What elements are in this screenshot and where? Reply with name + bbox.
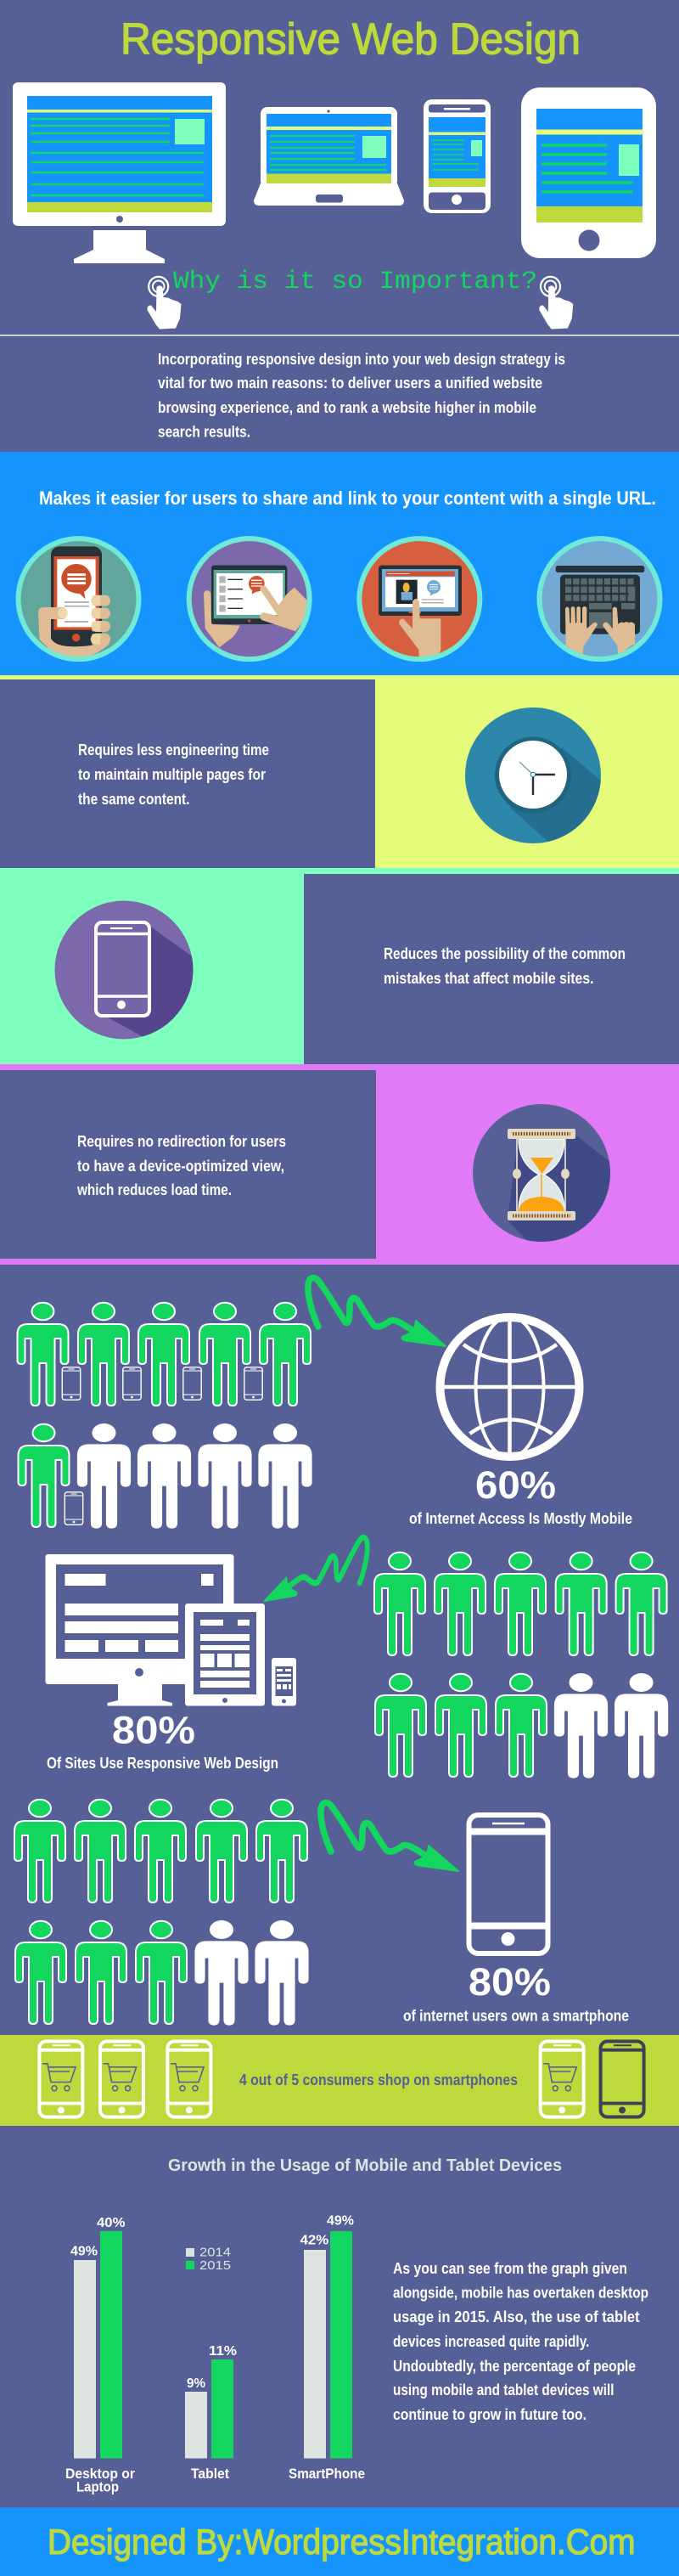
icon: right pointing hand	[539, 277, 573, 330]
icon: phone with cart 3	[167, 2042, 210, 2117]
bars: smartphone: 49%	[327, 2213, 354, 2228]
bars: desktop or laptop: 49%	[70, 2244, 98, 2258]
text: chart commentary: usage in 2015. Also, the use of tablet	[393, 2308, 640, 2325]
text: no redirection: which reduces load time.	[76, 1181, 232, 1198]
stat: 80 percent responsive: 80%	[112, 1709, 195, 1751]
people row 1	[374, 1553, 667, 1655]
stat: 60 percent	[409, 1463, 632, 1527]
stat group: responsive sites people	[374, 1553, 667, 1777]
icon: tablet	[521, 87, 656, 258]
icon: large smartphone	[469, 1815, 548, 1953]
bars: tablet: Tablet	[191, 2466, 229, 2482]
text: fewer mistakes: mistakes that affect mobile sites.	[384, 969, 594, 987]
arrow: people to globe	[308, 1278, 446, 1346]
bars: tablet	[185, 2344, 237, 2482]
stat: 80 percent smartphone: 80%	[469, 1960, 551, 2004]
people row 2	[19, 1423, 311, 1527]
icon: finger tapping tablet	[359, 538, 480, 661]
footer band	[0, 2507, 679, 2576]
chart legend: 2015	[199, 2258, 231, 2273]
text: chart commentary: using mobile and tablet devices will	[393, 2381, 614, 2398]
bars: smartphone: SmartPhone	[289, 2466, 365, 2482]
icon: phone with cart 1	[39, 2042, 82, 2117]
tablet	[185, 1604, 265, 1705]
panel: share single URL	[0, 452, 679, 675]
icon: phone with cart 4	[541, 2042, 584, 2117]
caption: responsive sites: Of Sites Use Responsive Web Design	[47, 1754, 278, 1772]
icon: laptop	[254, 107, 404, 206]
text: no redirection: Requires no redirection for users	[77, 1132, 286, 1150]
people row 1	[14, 1800, 307, 1902]
panel: consumers shopping band	[0, 2035, 679, 2126]
stat group: internet access people	[17, 1303, 311, 1527]
icon: hourglass	[473, 1104, 615, 1249]
icon: hands using tablet	[189, 538, 310, 659]
mini phone	[272, 1658, 296, 1705]
subheading text: Why is it so Important?	[173, 268, 537, 296]
bars: smartphone: 42%	[300, 2234, 328, 2247]
chart legend: 2014	[199, 2246, 231, 2259]
text: chart commentary: continue to grow in future too.	[393, 2405, 586, 2423]
icon: globe	[440, 1316, 580, 1457]
panel: no redirection	[0, 1064, 679, 1265]
chart legend	[186, 2246, 231, 2273]
bars: desktop or laptop: Laptop	[76, 2479, 119, 2495]
footer credit: Designed By:WordpressIntegration.Com	[48, 2522, 635, 2562]
panel: less engineering time	[0, 675, 679, 868]
icon: clock	[465, 707, 607, 849]
icon: desktop monitor	[13, 82, 226, 263]
stat: 80 percent responsive	[47, 1709, 278, 1772]
text: less engineering time	[78, 741, 269, 808]
bars: desktop or laptop	[65, 2216, 135, 2495]
people row 1	[17, 1303, 311, 1406]
text: no redirection	[76, 1132, 286, 1198]
text: fewer mistakes	[384, 944, 626, 987]
people row 2	[375, 1673, 667, 1777]
text: chart commentary: As you can see from the graph given	[393, 2259, 627, 2277]
text: fewer mistakes: Reduces the possibility of the common	[384, 944, 626, 962]
arrow: people to smartphone	[321, 1803, 458, 1871]
heading: growth chart: Growth in the Usage of Mobile and Tablet Devices	[168, 2156, 562, 2175]
text: chart commentary	[393, 2259, 648, 2423]
icon: hands on keyboard	[539, 538, 659, 659]
subheading with pointing hands	[147, 268, 573, 330]
icon: dark phone without cart	[601, 2042, 644, 2117]
stat: 80 percent smartphone	[403, 1960, 629, 2025]
people row 2	[15, 1920, 307, 2024]
intro text block: vital for two main reasons: to deliver users a unified website	[158, 374, 542, 392]
intro text block	[158, 350, 565, 440]
icon: left pointing hand	[147, 277, 182, 330]
text: 4 out of 5: 4 out of 5 consumers shop on smartphones	[239, 2072, 518, 2088]
text: no redirection: to have a device-optimized view,	[77, 1157, 284, 1175]
text: less engineering time: to maintain multiple pages for	[78, 765, 266, 783]
bars: desktop or laptop: Desktop or	[65, 2466, 135, 2482]
text: less engineering time: Requires less engineering time	[78, 741, 269, 758]
device illustrations	[13, 82, 656, 263]
stat: 60 percent: 60%	[475, 1463, 556, 1507]
icon: responsive devices	[46, 1554, 296, 1705]
text: chart commentary: Undoubtedly, the percentage of people	[393, 2357, 636, 2375]
icon: phone in circle	[54, 900, 197, 1045]
bars: tablet: 9%	[187, 2376, 205, 2391]
bars: desktop or laptop: 40%	[97, 2216, 126, 2230]
caption: smartphone owners: of internet users own a smartphone	[403, 2006, 629, 2025]
text: chart commentary: devices increased quite rapidly.	[393, 2332, 589, 2350]
bars: smartphone	[289, 2213, 365, 2482]
intro text block: browsing experience, and to rank a website higher in mobile	[158, 398, 536, 416]
icon: hand holding phone	[18, 538, 138, 659]
caption: internet access: of Internet Access Is Mostly Mobile	[409, 1509, 632, 1527]
bars: tablet: 11%	[209, 2344, 237, 2359]
icon: smartphone	[424, 99, 491, 213]
title: Responsive Web Design	[121, 15, 581, 65]
bar chart	[65, 2213, 365, 2495]
stat group: smartphone owners people	[14, 1800, 307, 2024]
intro text block: Incorporating responsive design into your web design strategy is	[158, 350, 565, 368]
intro text block: search results.	[158, 423, 250, 440]
monitor	[46, 1554, 234, 1705]
arrow: people to responsive devices	[264, 1537, 368, 1601]
text: less engineering time: the same content.	[78, 790, 190, 808]
panel: fewer mobile mistakes	[0, 868, 679, 1064]
icon: phone with cart 2	[100, 2042, 143, 2117]
